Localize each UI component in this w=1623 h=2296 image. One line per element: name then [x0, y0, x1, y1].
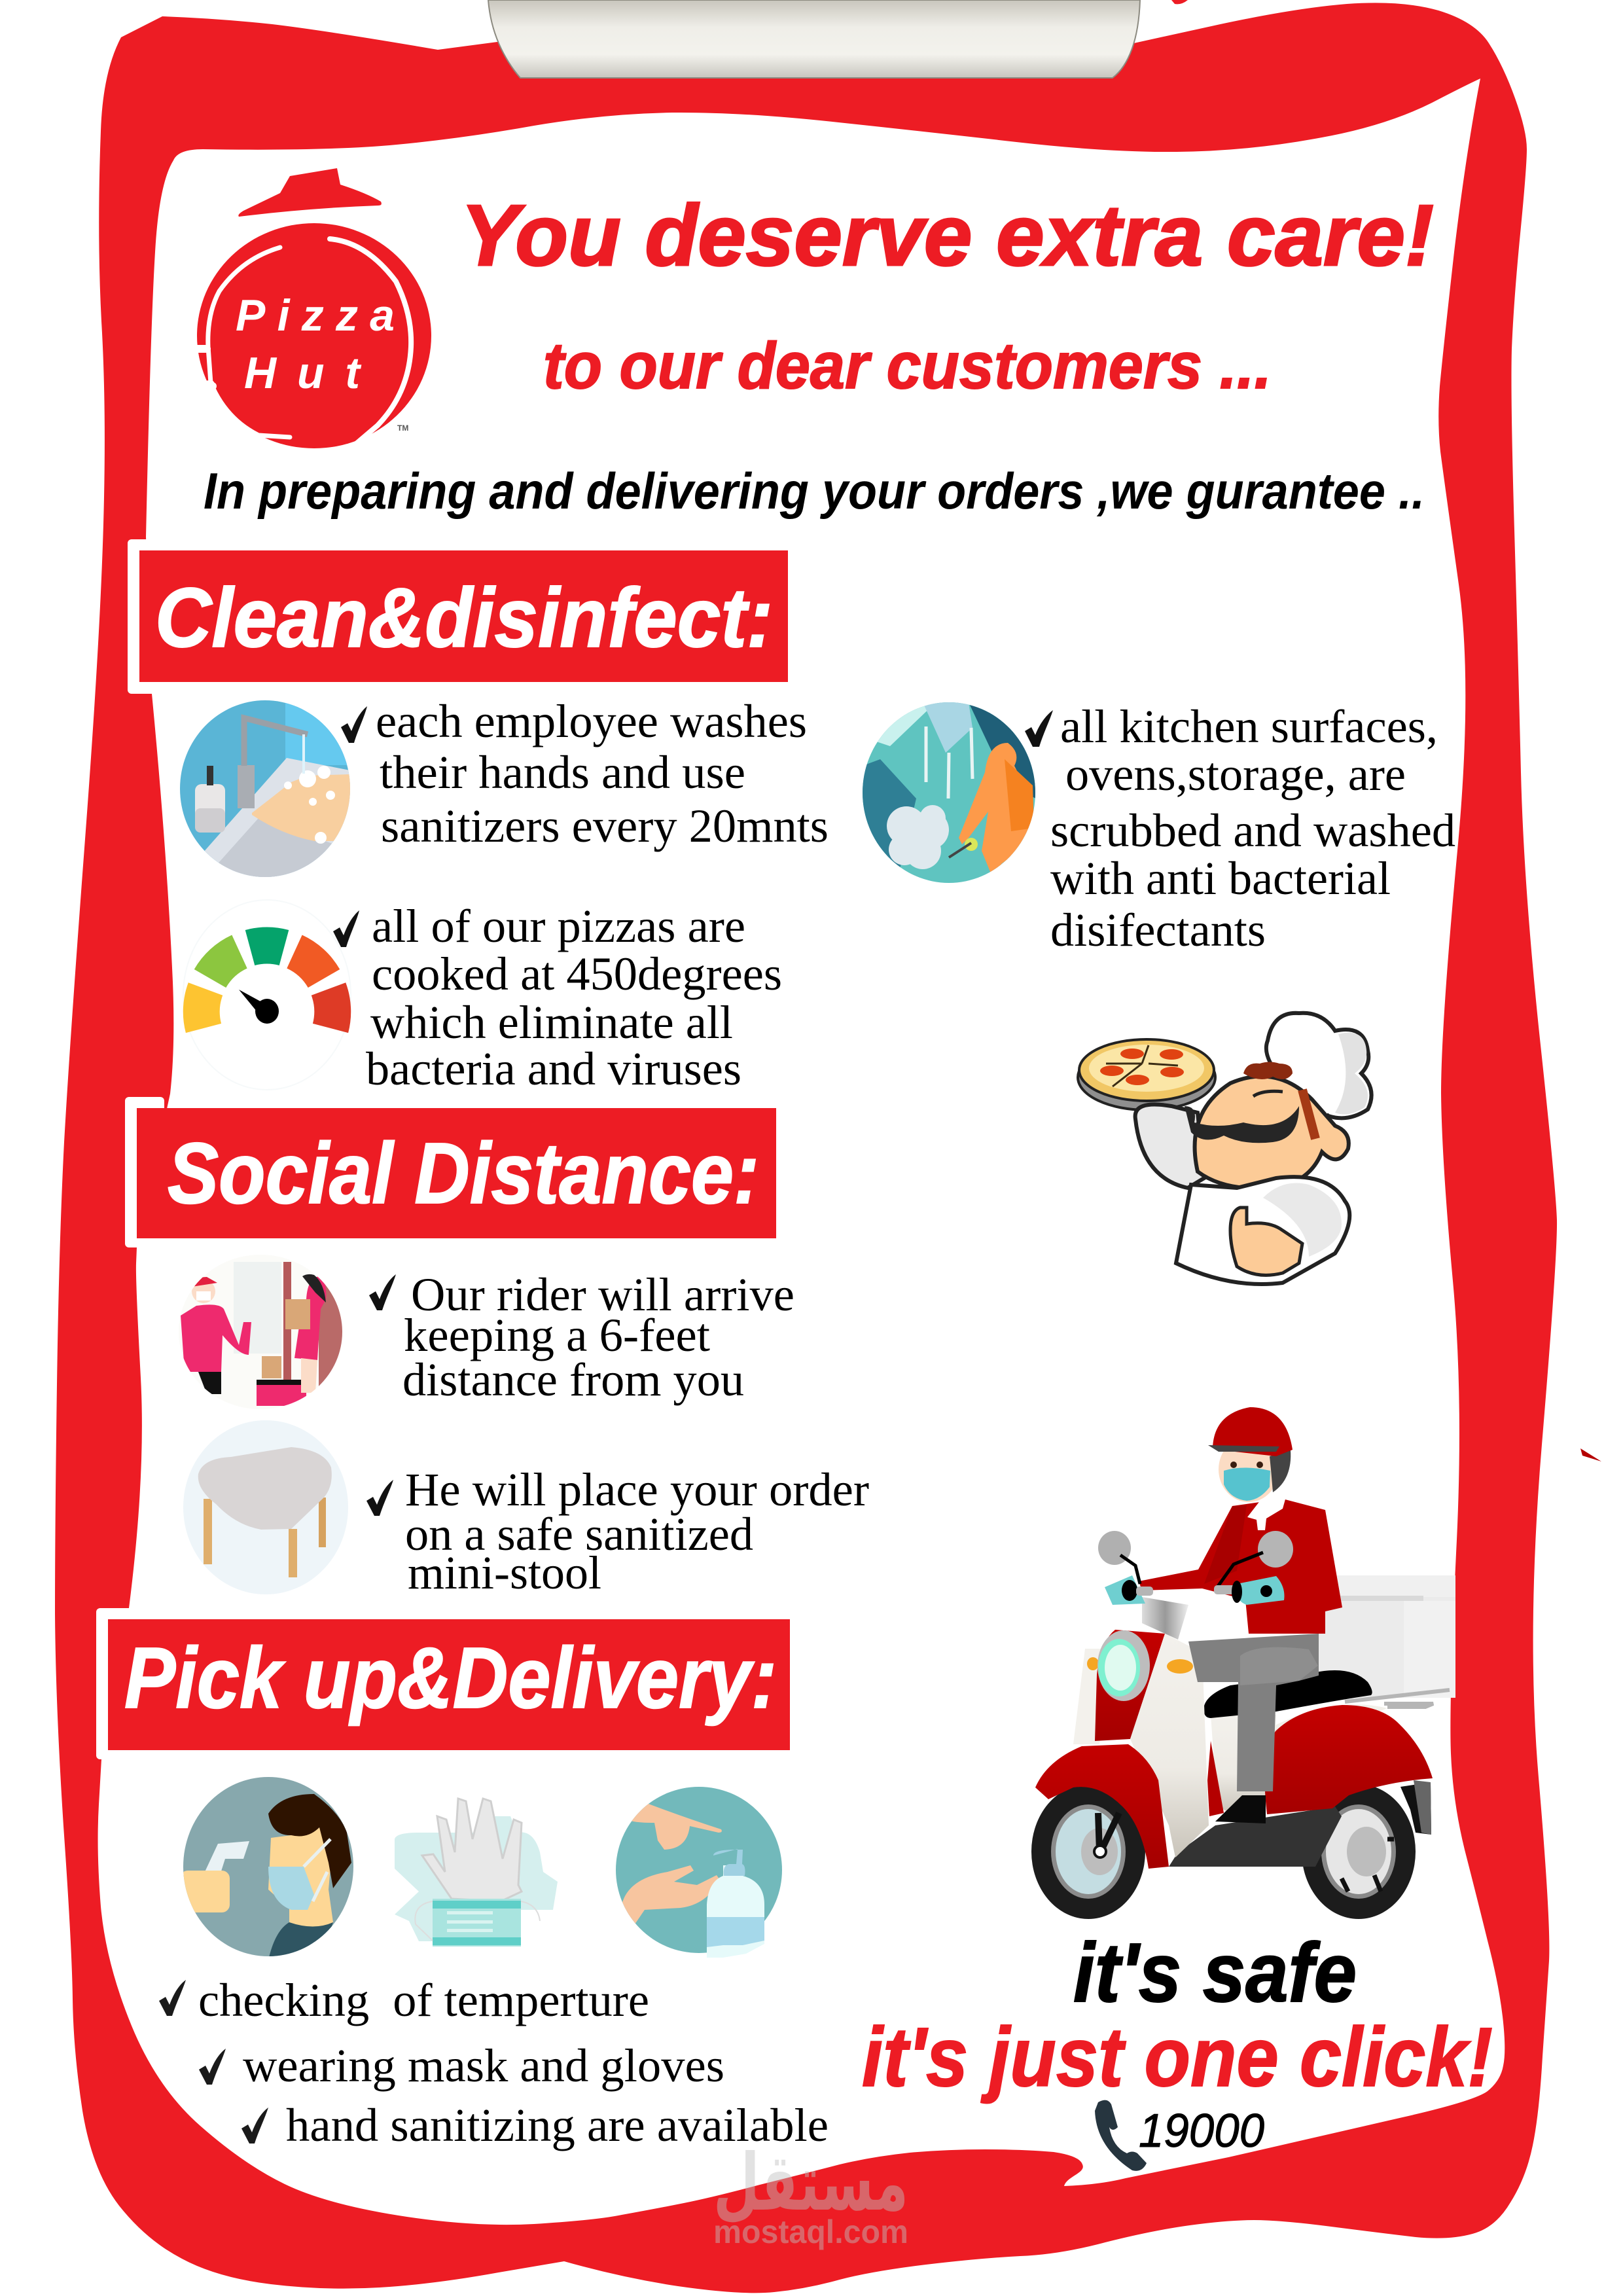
Pizza Hut logo: TM: [397, 423, 408, 433]
list: kitchen surfaces: disifectants: [1050, 904, 1266, 956]
list: pizza temperature: which eliminate all: [370, 996, 733, 1049]
list: pizza temperature: bacteria and viruses: [366, 1043, 741, 1095]
Pizza Hut logo: Hut: [244, 348, 361, 398]
list: rider distance: [369, 1268, 794, 1406]
list: mini stool: on a safe sanitized: [405, 1508, 753, 1560]
list: rider distance: distance from you: [402, 1354, 744, 1406]
list: hand washing: each employee washes: [376, 695, 807, 747]
list: pickup and delivery: checking of temperture: [198, 1974, 649, 2026]
icon: hand washing: [177, 697, 353, 880]
list: pickup and delivery: wearing mask and gloves: [243, 2039, 724, 2092]
list: kitchen surfaces: scrubbed and washed: [1050, 804, 1455, 857]
icon: mini stool: [183, 1420, 348, 1594]
list: pickup and delivery: hand sanitizing are available: [286, 2099, 829, 2151]
icon: gloves and mask: [395, 1799, 558, 1946]
list: mini stool: [366, 1463, 869, 1599]
callout: it's just one click: it's just one click!: [862, 2011, 1493, 2104]
illustration: chef with pizza: [1078, 1013, 1372, 1284]
icon: kitchen cleaning: [861, 700, 1037, 887]
list: pizza temperature: [333, 900, 782, 1095]
list: rider distance: Our rider will arrive: [411, 1268, 794, 1321]
list: kitchen surfaces: all kitchen surfaces,: [1060, 700, 1438, 753]
Pizza Hut logo: [194, 168, 431, 452]
watermark: mostaql: مستقل: [713, 2138, 908, 2229]
icon: temperature check: [180, 1774, 357, 1960]
watermark: mostaql: [713, 2138, 908, 2250]
list: hand washing: sanitizers every 20mnts: [381, 800, 829, 852]
heading: Social Distance: [125, 1097, 776, 1247]
heading: Pick up & Delivery: Pick up&Delivery:: [124, 1630, 777, 1726]
illustration: delivery rider on scooter: [1031, 1407, 1455, 1919]
list: hand washing: [341, 695, 829, 852]
guarantee line: In preparing and delivering your orders ,we gurantee ..: [204, 462, 1425, 520]
list: hand washing: their hands and use: [380, 746, 745, 798]
heading: Clean & disinfect: Clean&disinfect:: [155, 571, 773, 665]
list: pizza temperature: all of our pizzas are: [372, 900, 745, 952]
icon: phone: [1095, 2100, 1147, 2171]
list: kitchen surfaces: with anti bacterial: [1050, 852, 1391, 905]
clipboard clip: [488, 0, 1140, 78]
list: mini stool: He will place your order: [405, 1463, 869, 1516]
icon: hand sanitizing: [616, 1787, 782, 1958]
subtitle: to our dear customers ...: [543, 329, 1272, 403]
list: pizza temperature: cooked at 450degrees: [372, 948, 782, 1000]
heading: Social Distance: Social Distance:: [168, 1125, 759, 1221]
title: You deserve extra care!: [461, 187, 1434, 283]
callout: it's safe: it's safe: [1073, 1926, 1357, 2020]
icon: temperature gauge: [183, 900, 351, 1090]
list: pickup and delivery: [159, 1974, 829, 2151]
watermark: mostaql: mostaql.com: [713, 2214, 908, 2250]
Pizza Hut logo: Pizza: [236, 291, 395, 340]
list: mini stool: mini-stool: [408, 1547, 601, 1599]
list: kitchen surfaces: [1025, 700, 1455, 956]
icon: rider at door: [181, 1262, 342, 1406]
heading: Pick up & Delivery: [96, 1608, 790, 1759]
phone number: 19000: [1139, 2105, 1264, 2157]
list: kitchen surfaces: ovens,storage, are: [1065, 748, 1406, 800]
list: rider distance: keeping a 6-feet: [404, 1309, 710, 1361]
heading: Clean & disinfect: [128, 539, 788, 694]
